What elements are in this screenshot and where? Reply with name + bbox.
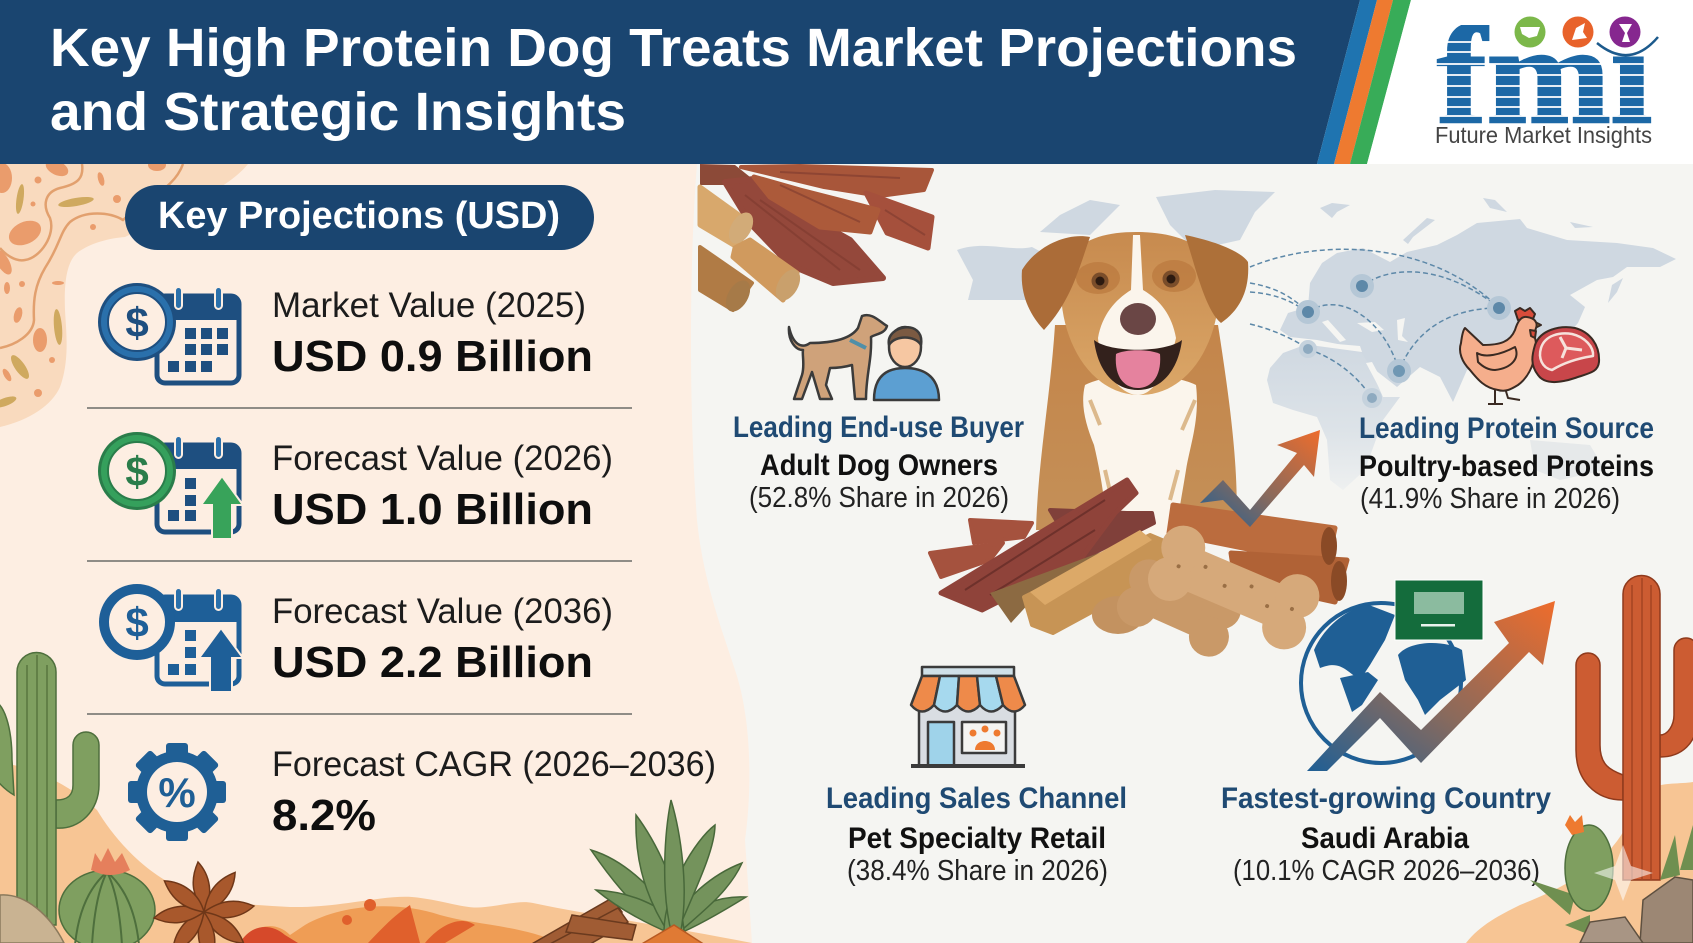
bone biscuit, upper (1141, 519, 1326, 656)
bone biscuit, lower (1110, 551, 1248, 665)
info block: Leading Protein Source: Leading Protein Source (1359, 412, 1654, 445)
icon: globe, flag and growth arrow (1301, 580, 1555, 771)
world map background (957, 190, 1676, 490)
icon: red saguaro cactus (1576, 576, 1693, 880)
icon: tall saguaro cactus (0, 653, 99, 925)
info block: Leading Sales Channel (826, 667, 1127, 887)
info block: Leading End-use Buyer: Leading End-use Buyer (733, 411, 1024, 444)
icon: dog and owner (789, 315, 939, 400)
info block: Leading Sales Channel: Leading Sales Channel (826, 782, 1127, 815)
metric row: Forecast Value 2036 (99, 584, 613, 692)
info block: Fastest-growing Country: Fastest-growing Country (1221, 782, 1551, 815)
icon: rock (0, 895, 64, 943)
metric row: Forecast CAGR: 8.2% (272, 791, 376, 840)
icon: small cactus, agave and rocks (1530, 815, 1693, 943)
info block: Fastest-growing Country: (10.1% CAGR 2026–2036) (1233, 855, 1540, 887)
icon: aloe plant (591, 800, 746, 943)
metric row: Market Value 2025: Market Value (2025) (272, 286, 586, 325)
logo: Future Market Insights: Future Market Insights (1435, 122, 1652, 148)
icon: dollar coin and calendar: $ (125, 299, 149, 346)
header banner (0, 0, 1693, 164)
icon: blue coin, calendar and up arrow: $ (125, 599, 149, 646)
metric row: Forecast CAGR: Forecast CAGR (2026–2036) (272, 745, 716, 784)
decorative pattern: top-left desert blob (0, 157, 248, 427)
icon: cinnamon sticks (530, 898, 636, 943)
icon: green coin, calendar and up arrow (98, 432, 243, 539)
illustration: treat pile (930, 480, 1347, 665)
icon: star anise (154, 862, 254, 943)
icon: gear with percent (128, 743, 226, 841)
info block: Leading End-use Buyer: Adult Dog Owners (760, 449, 998, 482)
section heading: Key Projections (USD): Key Projections (USD) (158, 195, 560, 237)
icon: dollar coin and calendar (98, 283, 239, 383)
metric row: Market Value 2025 (98, 283, 593, 383)
info block: Leading Sales Channel: (38.4% Share in 2026) (847, 855, 1108, 887)
info block: Leading Sales Channel: Pet Specialty Retail (848, 822, 1106, 855)
section heading: Key Projections (USD) (125, 185, 594, 250)
sparkle watermark (1594, 845, 1653, 901)
title (50, 18, 1297, 142)
info block: Leading Protein Source: Poultry-based Proteins (1359, 450, 1654, 483)
icon: gear with percent: % (158, 769, 196, 816)
icon: blue coin, calendar and up arrow (99, 584, 243, 692)
metric row: Forecast Value 2026 (98, 432, 613, 539)
sand dune (1466, 782, 1693, 943)
info block: Leading Protein Source: (41.9% Share in 2026) (1360, 483, 1620, 515)
info block: Leading End-use Buyer (733, 315, 1024, 514)
icon: barrel cactus with flower (59, 848, 155, 943)
desert scene: bottom right illustrations (1466, 576, 1693, 943)
metric row: Forecast Value 2026: USD 1.0 Billion (272, 485, 593, 534)
illustration: top-left jerky and chews (700, 164, 932, 316)
info block: Leading End-use Buyer: (52.8% Share in 2026) (749, 482, 1009, 514)
illustration: central dog (1022, 232, 1248, 535)
metric row: Forecast Value 2036: Forecast Value (2036) (272, 592, 613, 631)
arrow: small growth arrow (1200, 430, 1320, 527)
desert scene: bottom left illustrations (0, 653, 752, 943)
icon: green coin, calendar and up arrow: $ (125, 448, 149, 495)
metric row: Forecast Value 2026: Forecast Value (2026) (272, 439, 613, 478)
panel: key projections background (0, 157, 752, 943)
title: and Strategic Insights (50, 82, 626, 142)
metric row: Forecast Value 2036: USD 2.2 Billion (272, 638, 593, 687)
logo: Future Market Insights: fmi (1437, 0, 1652, 153)
metric row: Forecast CAGR (128, 743, 716, 841)
icon: pet store (911, 667, 1025, 766)
map route lines (1250, 249, 1511, 408)
info block: Fastest-growing Country (1221, 580, 1555, 887)
metric row: Market Value 2025: USD 0.9 Billion (272, 332, 593, 381)
sand dunes (0, 763, 752, 943)
title: Key High Protein Dog Treats Market Projections (50, 18, 1297, 78)
info block: Leading Protein Source (1359, 308, 1654, 515)
info block: Fastest-growing Country: Saudi Arabia (1301, 822, 1469, 855)
icon: chicken and steak (1460, 308, 1599, 404)
